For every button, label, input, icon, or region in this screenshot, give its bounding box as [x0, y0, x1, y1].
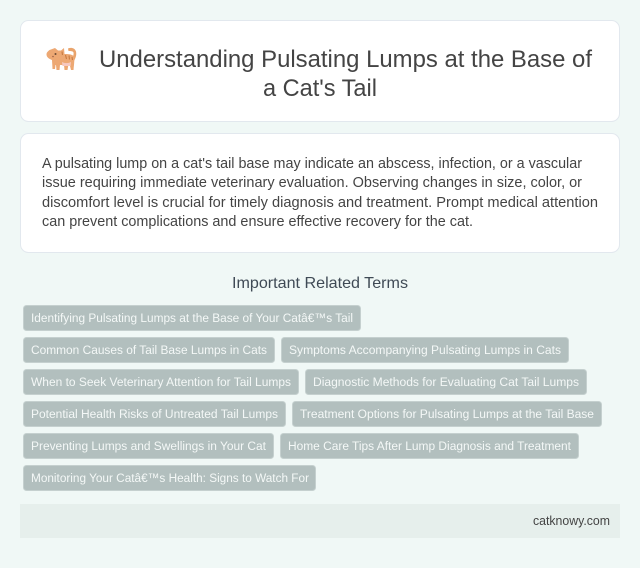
tag 5: Diagnostic Methods for Evaluating Cat Tail Lumps	[313, 375, 579, 389]
tag 4: When to Seek Veterinary Attention for Tail Lumps	[31, 375, 291, 389]
tag 7: Treatment Options for Pulsating Lumps at the Tail Base	[300, 407, 594, 421]
heading: related terms: Important Related Terms	[232, 275, 408, 292]
tag 10	[24, 466, 316, 490]
tag 4	[24, 370, 298, 394]
tag 3: Symptoms Accompanying Pulsating Lumps in Cats	[289, 343, 561, 357]
tag list	[24, 306, 602, 490]
footer: catknowy.com	[533, 514, 610, 528]
footer	[20, 504, 620, 538]
tag 1	[24, 306, 360, 330]
tag 2: Common Causes of Tail Base Lumps in Cats	[31, 343, 267, 357]
title: a Cat's Tail	[263, 75, 377, 102]
tag 10: Monitoring Your Catâ€™s Health: Signs to Watch For	[31, 471, 309, 485]
description text: can prevent complications and ensure effective recovery for the cat.	[42, 214, 473, 230]
tag 3	[282, 338, 568, 362]
tag 8: Preventing Lumps and Swellings in Your Cat	[31, 439, 267, 453]
title: Understanding Pulsating Lumps at the Base of	[99, 46, 592, 73]
tag 6: Potential Health Risks of Untreated Tail Lumps	[31, 407, 278, 421]
title	[99, 46, 592, 102]
tag 7	[292, 402, 602, 426]
tag 9: Home Care Tips After Lump Diagnosis and Treatment	[288, 439, 572, 453]
tag 8	[24, 434, 274, 458]
description text: discomfort level is crucial for timely diagnosis and treatment. Prompt medical attention	[42, 195, 598, 211]
panel: title card	[20, 20, 620, 122]
tag 5	[306, 370, 586, 394]
description text	[42, 156, 598, 230]
description text: A pulsating lump on a cat's tail base may indicate an abscess, infection, or a vascular	[42, 156, 582, 172]
description text: issue requiring immediate veterinary evaluation. Observing changes in size, color, or	[42, 175, 582, 191]
tag 9	[280, 434, 578, 458]
tag 6	[24, 402, 286, 426]
panel: description	[20, 134, 620, 252]
tag 1: Identifying Pulsating Lumps at the Base of Your Catâ€™s Tail	[31, 311, 353, 325]
icon: cat	[46, 48, 76, 70]
tag 2	[24, 338, 274, 362]
